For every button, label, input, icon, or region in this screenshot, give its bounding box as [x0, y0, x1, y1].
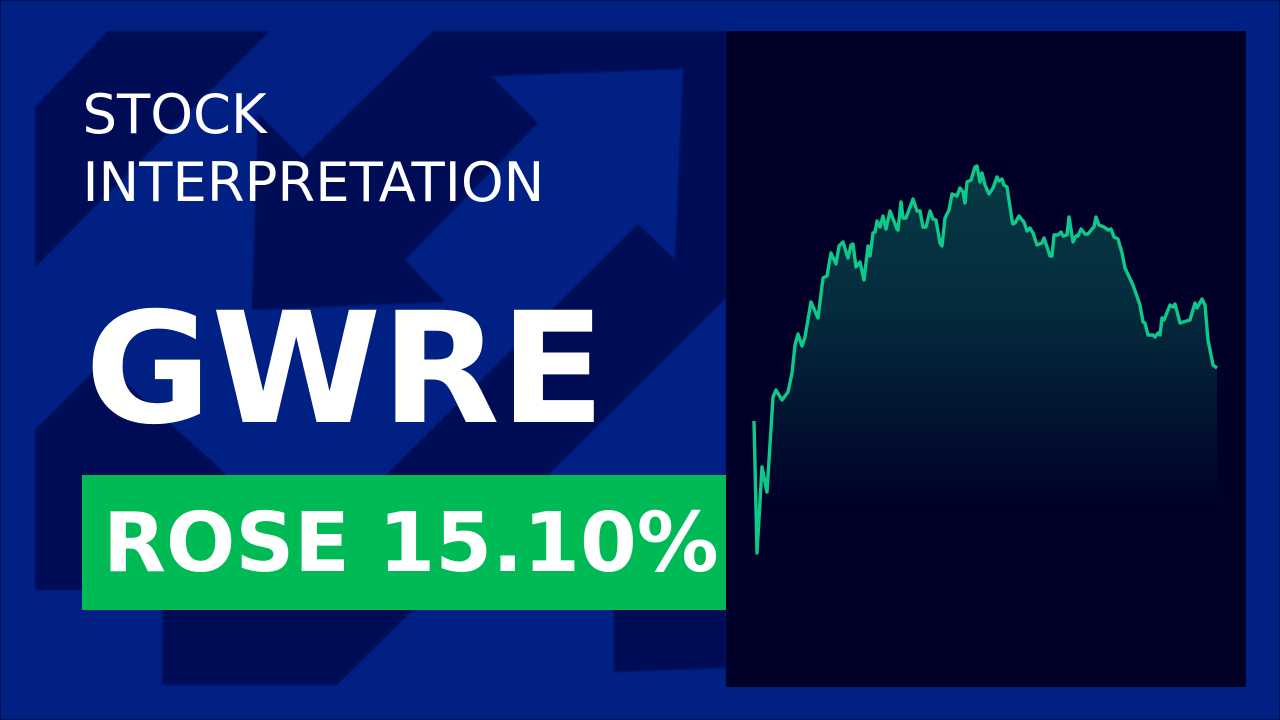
heading: stock interpretation: STOCK [82, 83, 268, 146]
price line [754, 166, 1217, 553]
heading: stock interpretation [82, 83, 544, 214]
heading: stock interpretation: INTERPRETATION [82, 151, 544, 214]
callout: rose percentage: ROSE 15.10% [103, 496, 719, 591]
background arrows [35, 31, 726, 685]
area fill [754, 166, 1217, 560]
ticker: GWRE: GWRE [85, 280, 605, 459]
callout: rose percentage [82, 475, 726, 610]
chart panel [726, 31, 1246, 687]
